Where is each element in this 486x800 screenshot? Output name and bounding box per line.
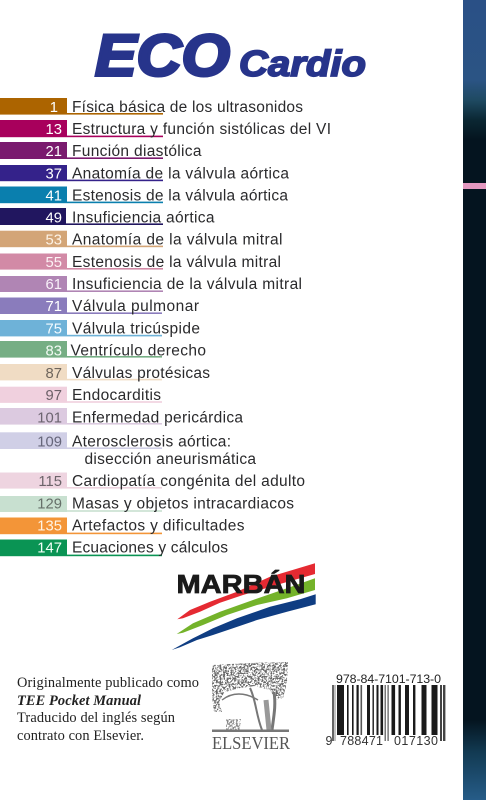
tree canopy <box>212 662 288 712</box>
chapter 13: Estructura y función sistólicas del VI <box>72 121 331 138</box>
chapter 109: disección aneurismática <box>84 451 256 468</box>
barcode digits <box>326 734 438 748</box>
registered mark: ® <box>306 566 312 575</box>
credit text: contrato con Elsevier. <box>17 728 144 744</box>
credit text: Originalmente publicado como <box>17 675 199 691</box>
chapter 1: Física básica de los ultrasonidos <box>72 99 303 116</box>
chapter 101 <box>0 408 243 426</box>
chapter 75: Válvula tricúspide <box>72 320 200 338</box>
chapter 115: Cardiopatía congénita del adulto <box>72 473 305 490</box>
chapter 71 <box>0 298 199 315</box>
chapter 97 <box>0 387 162 404</box>
tree trunk and branches <box>222 688 275 730</box>
chapter 21: 21 <box>46 144 62 160</box>
spine strip <box>463 0 486 800</box>
chapter 13: 13 <box>46 122 62 138</box>
chapter 135: Artefactos y dificultades <box>72 518 245 534</box>
chapter 83: 83 <box>46 344 62 360</box>
ISBN text: 978-84-7101-713-0 <box>336 672 441 686</box>
chapter 55: 55 <box>46 255 62 271</box>
chapter 101: Enfermedad pericárdica <box>72 410 243 426</box>
chapter 129: 129 <box>37 496 62 512</box>
chapter 37: 37 <box>46 166 62 182</box>
chapter 147: Ecuaciones y cálculos <box>72 540 228 556</box>
chapter 147: 147 <box>37 540 62 556</box>
chapter 109: 109 <box>37 434 62 450</box>
chapter 21 <box>0 142 202 160</box>
ground and foreground <box>212 730 289 732</box>
chapter 115: 115 <box>38 474 62 490</box>
chapter 75 <box>0 320 200 338</box>
chapter 75: 75 <box>46 322 62 338</box>
barcode digits: 788471 <box>340 734 383 748</box>
chapter 61: Insuficiencia de la válvula mitral <box>72 276 302 293</box>
chapter 135: 135 <box>37 518 62 534</box>
chapter 49: Insuficiencia aórtica <box>72 210 215 226</box>
chapter 71: 71 <box>46 299 62 315</box>
logo: Elsevier tree <box>212 662 290 753</box>
title: ECO Cardio: ECO <box>95 24 230 88</box>
barcode digits: 9 <box>326 734 332 748</box>
barcode <box>332 685 445 741</box>
chapter 49 <box>0 208 215 226</box>
chapter 109 <box>0 432 256 468</box>
chapter 71: Válvula pulmonar <box>72 298 199 315</box>
chapter 21: Función diastólica <box>72 143 202 160</box>
chapter 87: Válvulas protésicas <box>72 365 210 382</box>
chapter 109: Aterosclerosis aórtica: <box>72 434 231 450</box>
chapter 87 <box>0 364 210 382</box>
chapter 87: 87 <box>46 366 62 382</box>
chapter 41: Estenosis de la válvula aórtica <box>72 188 288 204</box>
title: ECO Cardio: Cardio <box>239 43 366 84</box>
chapter 97: 97 <box>46 388 62 404</box>
blue stripe <box>172 594 316 650</box>
chapter 129: Masas y objetos intracardiacos <box>72 496 294 512</box>
wordmark: MARBÁN <box>176 569 306 599</box>
barcode digits: 017130 <box>394 734 438 748</box>
chapter 53: Anatomía de la válvula mitral <box>72 232 282 248</box>
chapter 37: Anatomía de la válvula aórtica <box>72 166 289 182</box>
chapter 1: 1 <box>50 100 58 116</box>
chapter 83 <box>0 341 206 360</box>
red stripe <box>177 563 315 619</box>
chapter 101: 101 <box>37 410 62 426</box>
contents list <box>0 98 331 556</box>
chapter 147 <box>0 540 228 556</box>
title: ECO Cardio <box>95 24 366 88</box>
chapter 55: Estenosis de la válvula mitral <box>72 254 281 271</box>
chapter 83: Ventrículo derecho <box>70 342 206 360</box>
credit text <box>17 675 199 744</box>
chapter 49: 49 <box>46 210 62 226</box>
wordmark: ELSEVIER <box>212 733 290 753</box>
chapter 41: 41 <box>46 188 62 204</box>
logo: Marbán <box>172 563 316 650</box>
chapter 97: Endocarditis <box>72 387 161 404</box>
chapter 61: 61 <box>46 277 62 293</box>
chapter 53: 53 <box>46 232 62 248</box>
credit text: Traducido del inglés según <box>17 710 175 726</box>
credit text: TEE Pocket Manual <box>17 693 141 709</box>
green stripe <box>177 578 315 634</box>
